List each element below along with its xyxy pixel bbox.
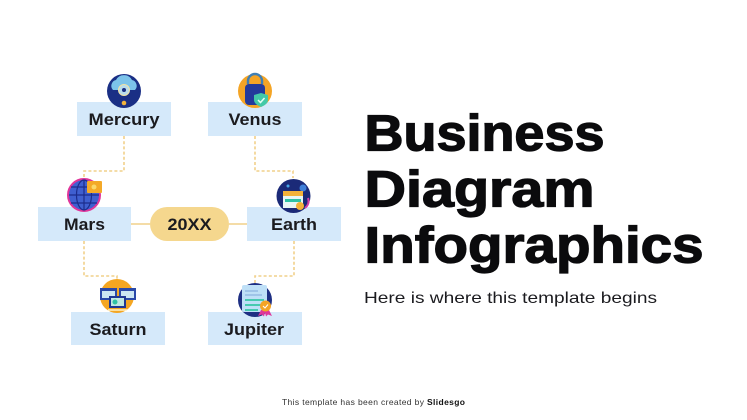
icon: Mercury cloud <box>107 74 141 108</box>
connector: Mars to center <box>131 223 150 225</box>
title: Diagram <box>364 160 594 218</box>
title: Business <box>364 104 604 162</box>
connector: center to Earth <box>229 223 247 225</box>
node: Mercury: Mercury <box>88 110 160 129</box>
icon: Earth calendar <box>276 179 310 213</box>
node: Venus <box>208 102 302 136</box>
icon: Venus padlock <box>238 74 272 108</box>
connector: Mercury to Mars <box>84 136 124 178</box>
title <box>364 104 704 274</box>
node: Saturn <box>71 312 165 345</box>
node: Mercury <box>77 102 171 136</box>
node: Mars <box>38 207 131 241</box>
node: Mars: Mars <box>64 215 105 234</box>
node: Venus: Venus <box>228 110 282 129</box>
icon: Mars globe <box>68 179 102 211</box>
node: Saturn: Saturn <box>90 320 146 339</box>
connector: Earth to Jupiter <box>255 241 294 283</box>
icon: Saturn monitors <box>100 279 136 313</box>
subtitle: Here is where this template begins <box>364 290 657 307</box>
node: Jupiter <box>208 312 302 345</box>
connector: Mars to Saturn <box>84 241 117 283</box>
node: center 20XX <box>150 207 229 241</box>
node: Earth <box>247 207 341 241</box>
connector: Venus to Earth <box>255 136 293 178</box>
node: Earth: Earth <box>271 215 317 234</box>
node: center 20XX: 20XX <box>168 215 212 234</box>
node: Jupiter: Jupiter <box>224 320 284 339</box>
title: Infographics <box>364 216 704 274</box>
footer credit: This template has been created by Slidesgo <box>282 397 465 407</box>
icon: Jupiter certificate <box>238 283 272 317</box>
